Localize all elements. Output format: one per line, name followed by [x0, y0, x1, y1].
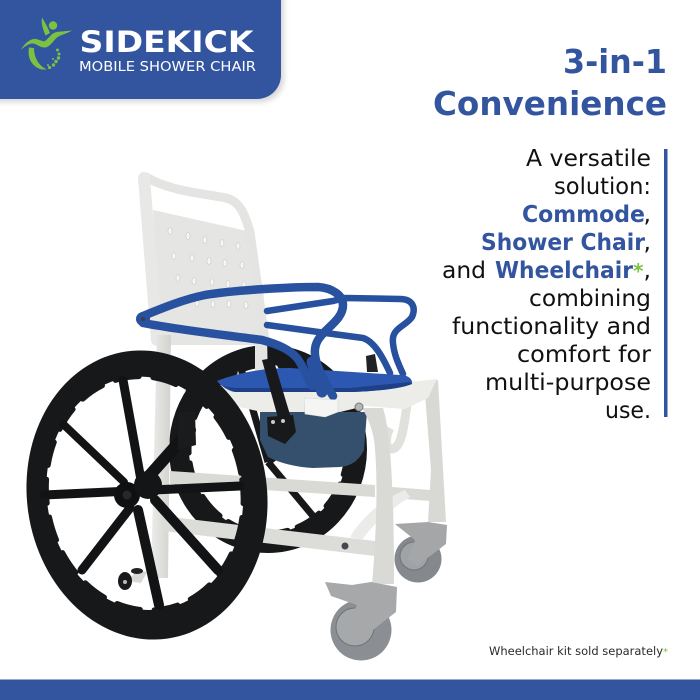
brake lever	[262, 358, 296, 444]
near arm rest	[143, 287, 343, 396]
title: Convenience	[433, 84, 667, 123]
footnote: *	[663, 647, 668, 658]
arm pivot	[136, 312, 150, 326]
spokes	[44, 380, 240, 605]
rear post	[151, 335, 171, 578]
description text	[442, 144, 651, 424]
seat frame	[218, 379, 437, 412]
commode bucket	[260, 412, 367, 468]
logo wordmark: SIDEKICK	[80, 25, 255, 59]
description text: *	[633, 259, 644, 283]
far leg	[424, 380, 446, 522]
description text: multi-purpose	[485, 368, 651, 396]
logo tagline: MOBILE SHOWER CHAIR	[79, 60, 256, 75]
blue seat	[217, 368, 412, 392]
lower frame bars	[163, 471, 430, 556]
description text: A versatile	[526, 144, 651, 172]
description text: ,	[644, 200, 651, 228]
accent vertical bar	[664, 149, 668, 417]
description text: Shower Chair	[481, 228, 645, 256]
front leg	[362, 408, 394, 584]
title	[433, 42, 667, 123]
description text: solution:	[554, 172, 651, 200]
description text: ,	[644, 228, 651, 256]
crossbrace	[350, 490, 410, 540]
front caster	[325, 582, 397, 660]
backrest	[144, 177, 267, 345]
seat cut-out support	[386, 398, 408, 449]
description text: Commode	[522, 200, 645, 228]
description text: combining	[529, 284, 651, 312]
seat clamp	[304, 398, 338, 417]
near rear wheel	[8, 335, 286, 655]
title: 3-in-1	[563, 42, 667, 81]
bottom band	[0, 680, 700, 700]
logo icon	[20, 18, 72, 70]
description text: Wheelchair	[495, 256, 633, 284]
description text: ,	[644, 256, 651, 284]
far arm rest	[267, 298, 414, 374]
far brake handle	[366, 354, 378, 372]
footnote: Wheelchair kit sold separately	[489, 644, 663, 658]
description text: use.	[605, 396, 651, 424]
back holes	[168, 228, 248, 308]
description text: comfort for	[517, 340, 651, 368]
description text: functionality and	[452, 312, 651, 340]
chair illustration	[8, 177, 447, 660]
description text: and	[442, 256, 486, 284]
far caster	[394, 522, 447, 582]
anti-tip roller	[118, 568, 147, 590]
header banner	[0, 0, 284, 102]
far rear wheel	[179, 355, 357, 543]
